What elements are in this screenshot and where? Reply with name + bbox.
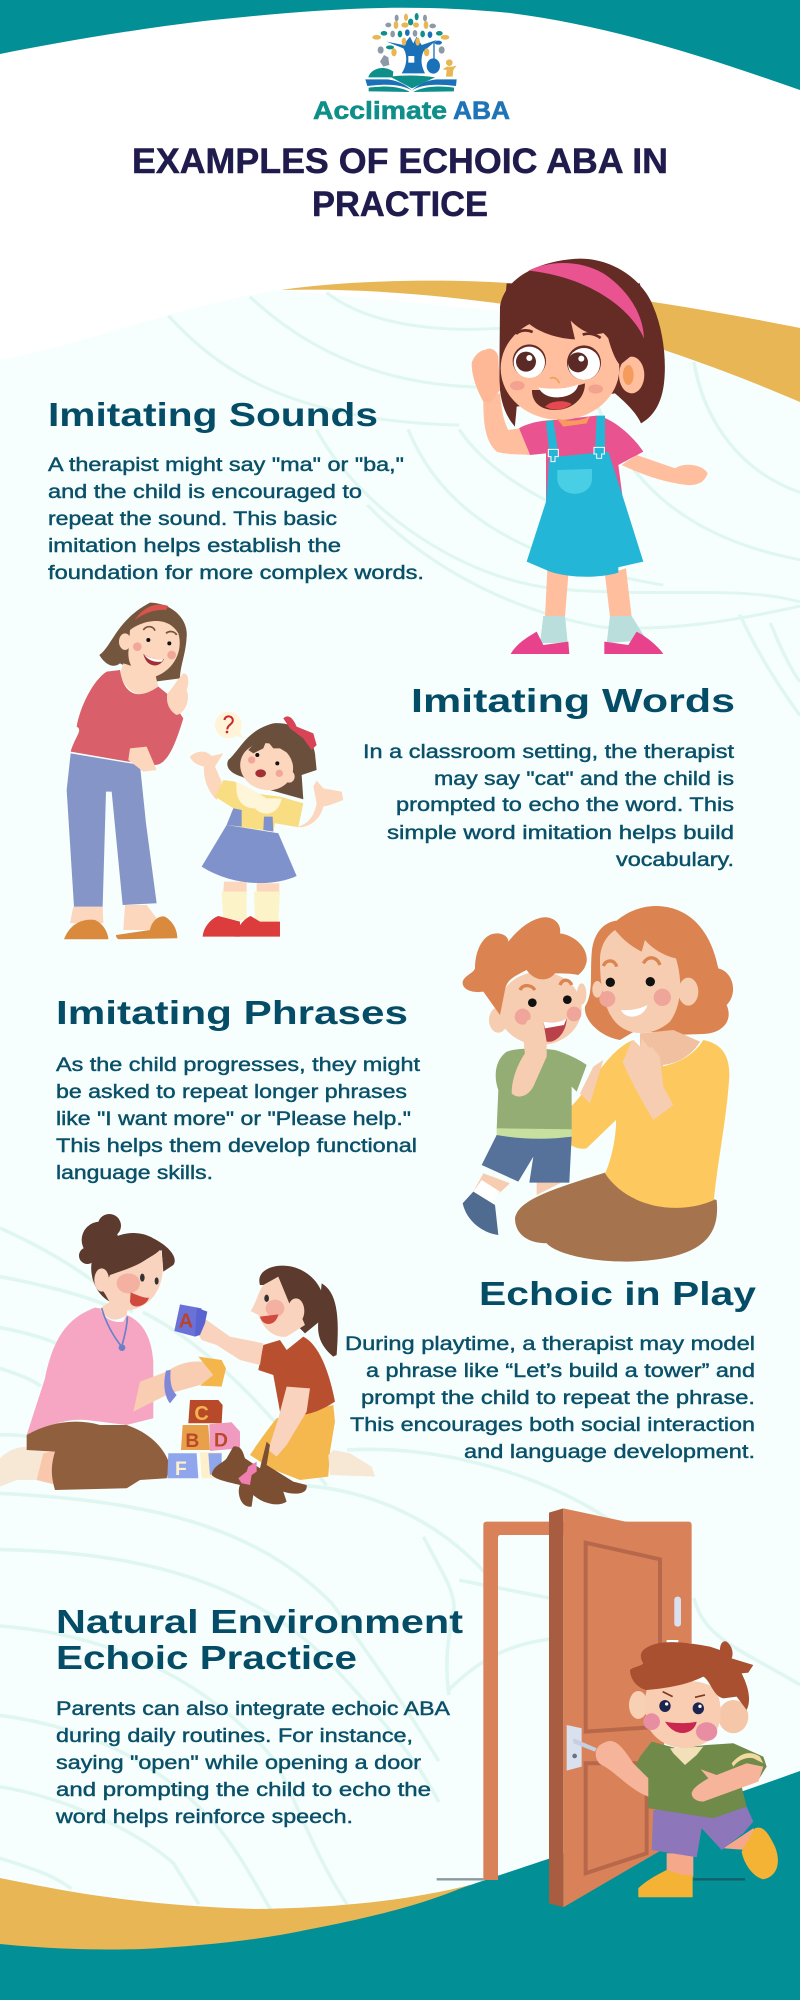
title: EXAMPLES OF ECHOIC ABA IN bbox=[132, 142, 668, 181]
illustration: therapist and child playing with blocks bbox=[0, 1214, 375, 1507]
text block: Echoic in Play: Echoic in Play bbox=[479, 1275, 757, 1312]
illustration: woman and questioning little girl bbox=[64, 603, 343, 939]
icon: tree and open book bbox=[365, 13, 457, 92]
text block: Natural Environment Echoic Practice: Parents can also integrate echoic ABA bbox=[56, 1698, 450, 1720]
bottom teal wave bbox=[0, 1771, 800, 2000]
logo wordmark: Acclimate bbox=[313, 97, 447, 125]
title: PRACTICE bbox=[312, 185, 488, 224]
toy blocks: A bbox=[179, 1311, 193, 1333]
text block: Natural Environment Echoic Practice bbox=[55, 1603, 463, 1828]
teddy bear bbox=[212, 1442, 307, 1507]
toy blocks: D bbox=[214, 1431, 228, 1452]
text block: Imitating Sounds: imitation helps establish the bbox=[48, 535, 341, 557]
text block: Echoic in Play: and language development. bbox=[464, 1441, 755, 1463]
text block: Imitating Sounds: A therapist might say "ma" or "ba," bbox=[48, 454, 404, 476]
toy blocks bbox=[167, 1304, 240, 1480]
text block: Echoic in Play: This encourages both social interaction bbox=[350, 1414, 755, 1436]
text block: Imitating Sounds: Imitating Sounds bbox=[48, 396, 378, 433]
illustration: boy whispering with mother bbox=[463, 906, 733, 1262]
gold swoosh bbox=[281, 281, 800, 402]
text block: Imitating Sounds: repeat the sound. This basic bbox=[48, 508, 337, 530]
text block: Echoic in Play bbox=[345, 1275, 757, 1463]
toy blocks: C bbox=[194, 1403, 209, 1425]
text block: Imitating Phrases: Imitating Phrases bbox=[56, 994, 408, 1031]
text block: Natural Environment Echoic Practice: word helps reinforce speech. bbox=[55, 1806, 353, 1828]
text block: Imitating Words: prompted to echo the word. This bbox=[396, 794, 734, 816]
text block: Imitating Words: may say "cat" and the child is bbox=[434, 768, 734, 790]
text block: Imitating Sounds: foundation for more complex words. bbox=[48, 562, 424, 584]
text block: Imitating Phrases: As the child progresses, they might bbox=[56, 1054, 421, 1076]
toy blocks: B bbox=[185, 1431, 199, 1452]
illustration: girl cupping her ear bbox=[472, 259, 708, 654]
text block: Imitating Phrases bbox=[56, 994, 421, 1184]
text block: Echoic in Play: During playtime, a therapist may model bbox=[345, 1333, 755, 1355]
text block: Natural Environment Echoic Practice: and prompting the child to echo the bbox=[56, 1779, 431, 1801]
logo wordmark: ABA bbox=[453, 97, 510, 125]
text block: Natural Environment Echoic Practice: Natural Environment bbox=[56, 1603, 463, 1640]
logo: Acclimate ABA bbox=[313, 13, 510, 125]
text block: Echoic in Play: prompt the child to repeat the phrase. bbox=[361, 1387, 755, 1409]
top teal wave bbox=[0, 0, 800, 90]
text block: Natural Environment Echoic Practice: during daily routines. For instance, bbox=[56, 1725, 413, 1747]
text block: Imitating Phrases: like "I want more" or "Please help." bbox=[56, 1108, 411, 1130]
text block: Imitating Words: Imitating Words bbox=[411, 682, 735, 719]
text block: Imitating Sounds: and the child is encouraged to bbox=[48, 481, 362, 503]
text block: Imitating Phrases: This helps them develop functional bbox=[56, 1135, 417, 1157]
toy blocks: F bbox=[175, 1459, 187, 1480]
text block: Imitating Words: vocabulary. bbox=[616, 849, 734, 871]
title bbox=[132, 142, 668, 224]
text block: Echoic in Play: a phrase like “Let’s build a tower” and bbox=[366, 1360, 755, 1382]
bottom gold wave bbox=[0, 1878, 470, 1950]
text block: Imitating Sounds bbox=[48, 396, 424, 584]
text block: Natural Environment Echoic Practice: saying "open" while opening a door bbox=[56, 1752, 422, 1774]
text block: Imitating Phrases: language skills. bbox=[56, 1162, 213, 1184]
text block: Natural Environment Echoic Practice: Echoic Practice bbox=[56, 1639, 357, 1676]
text block: Imitating Words: simple word imitation helps build bbox=[387, 822, 734, 844]
text block: Imitating Phrases: be asked to repeat longer phrases bbox=[56, 1081, 407, 1103]
illustration: door and boy opening it bbox=[437, 1508, 778, 1907]
text block: Imitating Words: In a classroom setting, the therapist bbox=[363, 741, 735, 763]
text block: Imitating Words bbox=[363, 682, 735, 871]
